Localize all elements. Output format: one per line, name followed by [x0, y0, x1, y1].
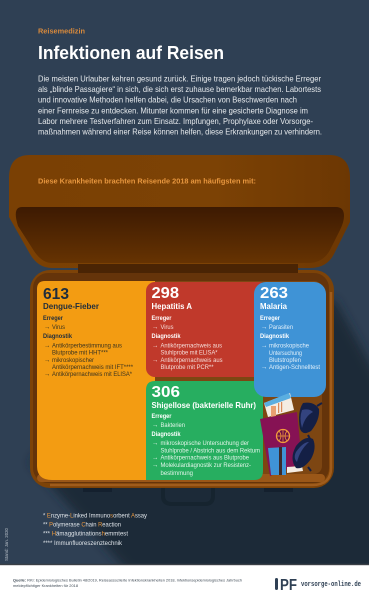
details: → [152, 462, 158, 469]
details: Stuhlprobe / Abstrich aus dem Rektum [160, 448, 260, 454]
details: Diagnostik [152, 333, 181, 340]
details: Antikörpernachweis mit IFT**** [52, 364, 133, 371]
suitcase body [30, 264, 334, 488]
suitcase lid [9, 155, 350, 268]
details: mikroskopischer [52, 357, 95, 364]
details: Diagnostik [260, 333, 289, 340]
details: Diagnostik [43, 333, 72, 340]
name: Hepatitis A [152, 301, 192, 311]
details: Erreger [152, 315, 172, 322]
details: → [261, 342, 267, 350]
intro text: Die meisten Urlauber kehren gesund zurück. Einige tragen jedoch tückische Erreger [38, 74, 321, 84]
source: Quelle: RKI: Epidemiologisches Bulletin 48/2019, Reiseassoziierte Infektionskrankheiten 2018, Infektionsepidemiologisches Jahrbuch [13, 578, 242, 583]
intro text: Labor mehrere Testverfahren zum Einsatz. Impfungen, Prophylaxe oder Vorsorge- [38, 116, 313, 126]
details: Bakterien [160, 422, 185, 429]
details: → [44, 342, 50, 350]
footnotes [43, 512, 148, 547]
details: Antigen-Schnelltest [269, 364, 320, 371]
handle and feet [83, 488, 293, 504]
details: Parasiten [269, 324, 293, 331]
number: 263 [260, 285, 288, 302]
details: → [152, 440, 158, 447]
date stamp: Stand: Jan. 2020 [4, 528, 9, 561]
title: Infektionen auf Reisen [38, 42, 224, 63]
name: Shigellose (bakterielle Ruhr) [152, 400, 256, 410]
details: → [44, 371, 50, 378]
details: bestimmung [160, 470, 193, 477]
details: Erreger [152, 413, 172, 420]
details: Blutstropfen [269, 357, 301, 364]
details: → [44, 357, 50, 364]
details: Virus [52, 324, 65, 331]
intro text: maßnahmen während einer Reise können helfen, diese Erkrankungen zu verhindern. [38, 127, 322, 137]
panel: Hepatitis A [146, 282, 268, 377]
source [13, 578, 242, 588]
panel: Dengue [37, 281, 155, 480]
details: Antikörpernachweis mit ELISA* [52, 371, 132, 378]
lid heading: Diese Krankheiten brachten Reisende 2018 am häufigsten mit: [38, 176, 256, 186]
details: mikroskopische [269, 342, 309, 350]
details: Molekulardiagnostik zur Resistenz- [160, 462, 251, 469]
icon: passport [260, 412, 302, 476]
intro text: einer Fernreise zu entdecken. Mitunter kommen für eine gesicherte Diagnose im [38, 105, 308, 115]
details: Virus [160, 324, 174, 331]
details [43, 315, 133, 378]
panel: Malaria [254, 282, 326, 397]
logo: PF [280, 577, 297, 594]
number: 306 [152, 384, 180, 401]
details: Untersuchung [269, 350, 302, 357]
details: → [261, 324, 267, 331]
details: → [152, 324, 158, 331]
footnotes: * Enzyme-Linked Immunosorbent Assay [43, 512, 148, 520]
details: → [152, 342, 158, 350]
details: → [152, 422, 158, 429]
footer [0, 564, 369, 600]
footnotes: ** Polymerase Chain Reaction [43, 522, 121, 529]
details: Blutprobe mit PCR** [160, 364, 214, 371]
details: Erreger [43, 315, 63, 322]
details: → [152, 454, 158, 462]
name: Dengue-Fieber [43, 301, 100, 311]
icon: sunglasses [292, 403, 322, 471]
details: → [261, 364, 267, 371]
details: Erreger [260, 315, 280, 322]
number: 298 [152, 285, 179, 302]
intro text: und innovative Methoden helfen dabei, die Ursachen von Beschwerden nach [38, 95, 297, 105]
icon: cards [268, 447, 303, 475]
panel: Shigellose [146, 381, 263, 480]
source: meldepflichtiger Krankheiten für 2018 [13, 583, 79, 588]
intro text [38, 74, 322, 137]
kicker: Reisemedizin [38, 26, 85, 36]
details: Blutprobe mit HHT*** [52, 350, 108, 356]
logo [275, 577, 361, 594]
details: → [44, 324, 50, 331]
details [152, 315, 222, 371]
details: Antikörperbestimmung aus [52, 342, 122, 350]
details: Stuhlprobe mit ELISA* [160, 350, 218, 356]
details: Diagnostik [152, 431, 181, 438]
name: Malaria [260, 301, 287, 311]
footnotes: *** Hämagglutinationshemmtest [43, 531, 128, 538]
details: → [152, 357, 158, 364]
number: 613 [43, 286, 69, 303]
details: Antikörpernachweis aus [160, 342, 222, 350]
details [260, 315, 320, 371]
details: Antikörpernachweis aus Blutprobe [160, 454, 249, 462]
details: Antikörpernachweis aus [160, 357, 222, 364]
footnotes: **** Immunfluoreszenztechnik [43, 540, 123, 547]
header block [38, 26, 322, 137]
intro text: als „blinde Passagiere“ in sich, die sich erst zuhause bemerkbar machen. Labortests [38, 84, 321, 94]
details: mikroskopische Untersuchung der [160, 440, 250, 447]
details [152, 413, 260, 477]
icon: travel items [260, 393, 322, 476]
case shadow [30, 300, 369, 572]
icon: ticket [264, 393, 294, 417]
